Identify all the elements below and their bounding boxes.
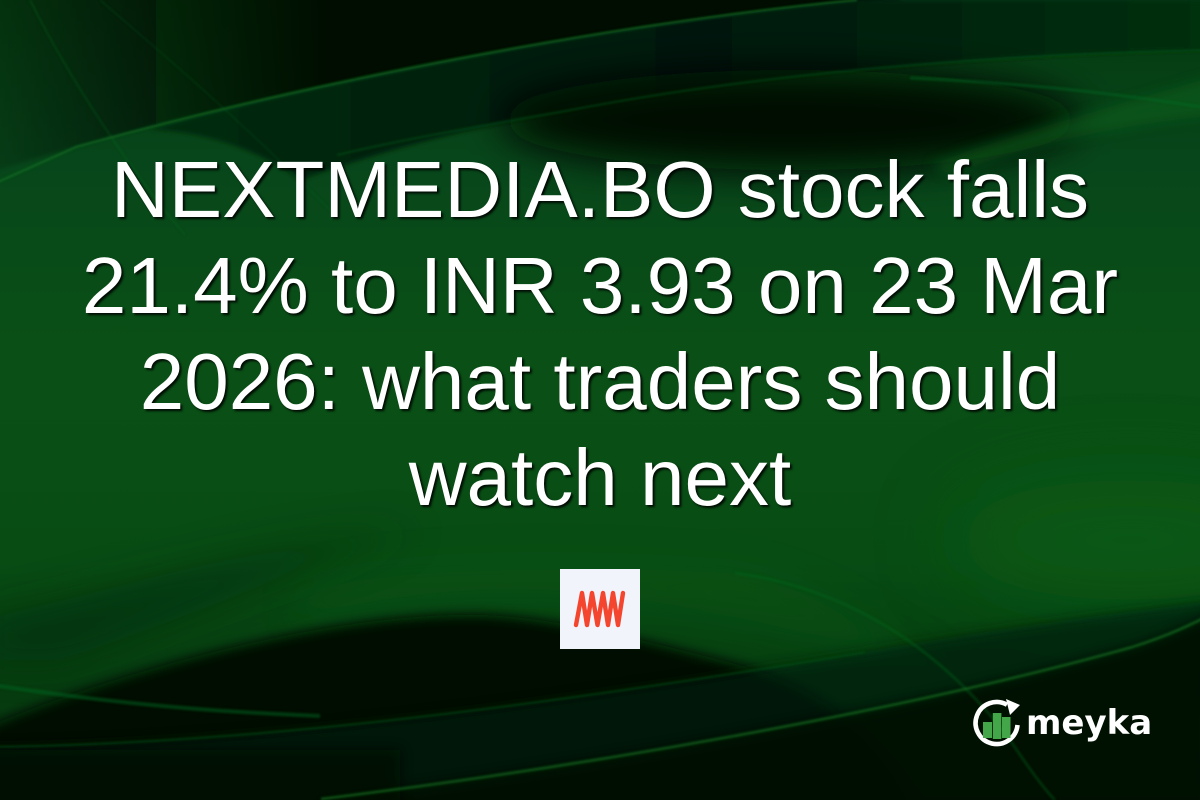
right-hand streaks bbox=[930, 75, 1200, 175]
title: 21.4% to INR 3.93 on 23 Mar bbox=[82, 241, 1118, 330]
dark band on the left bbox=[0, 530, 420, 660]
logo: meyka bbox=[973, 699, 1152, 746]
title: NEXTMEDIA.BO stock falls bbox=[111, 145, 1089, 234]
title bbox=[82, 145, 1120, 522]
icon: circular arrow with bars bbox=[976, 699, 1020, 744]
title: watch next bbox=[409, 433, 791, 522]
wordmark: meyka bbox=[1026, 703, 1152, 743]
top dark sheets bbox=[0, 0, 900, 175]
title: 2026: what traders should bbox=[140, 337, 1060, 426]
glow on the lower right bbox=[950, 480, 1200, 600]
icon: stock logo bbox=[560, 569, 640, 649]
bottom hill bbox=[0, 615, 920, 800]
